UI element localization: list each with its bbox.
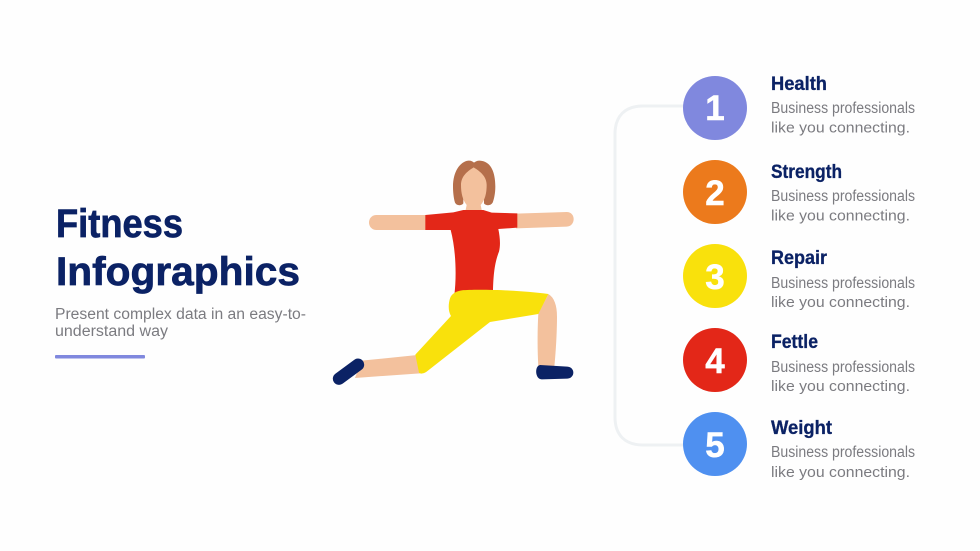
health text: Health [771,74,827,95]
fettle text [771,332,915,395]
repair text: Repair [771,248,828,269]
subtitle text: understand way [55,323,168,340]
number badge 3 [683,244,747,308]
hair [453,161,495,205]
number badge 5 [683,412,747,476]
number badge 4: 4 [705,342,725,381]
item 5: weight [683,412,915,481]
right arm [516,212,574,228]
weight text [771,418,915,481]
health text [771,74,915,136]
face and neck [461,167,487,211]
number badge 3: 3 [705,258,725,297]
front shin [538,294,557,367]
number badge 4 [683,328,747,392]
left arm [369,215,427,230]
health text: like you connecting. [771,120,910,136]
number badge 2 [683,160,747,224]
front shoe [536,365,573,379]
strength text: Business professionals [771,188,915,205]
repair text: Business professionals [771,275,915,292]
yellow shorts [415,290,548,374]
repair text [771,248,915,311]
illustration: lunging woman [339,161,574,379]
subtitle text: Present complex data in an easy-to- [55,306,306,323]
health text: Business professionals [771,100,915,117]
strength text [771,162,915,224]
subtitle text [55,306,306,340]
item 1: health [683,74,915,140]
number badge 1: 1 [705,89,725,128]
shirt [425,210,517,295]
fettle text: like you connecting. [771,379,910,395]
fettle text: Business professionals [771,359,915,376]
weight text: Business professionals [771,444,915,461]
strength text: like you connecting. [771,208,910,224]
number badge 1 [683,76,747,140]
title [56,202,300,294]
item 3: repair [683,244,915,311]
back shin [355,355,420,378]
item 2: strength [683,160,915,224]
fettle text: Fettle [771,332,818,353]
back shoe [339,365,358,379]
number badge 2: 2 [705,174,725,213]
weight text: Weight [771,418,833,439]
title: Fitness [56,202,183,246]
connector bracket [615,106,684,445]
title: Infographics [56,250,300,294]
weight text: like you connecting. [771,465,910,481]
accent underline [55,355,145,358]
number badge 5: 5 [705,426,725,465]
repair text: like you connecting. [771,295,910,311]
item 4: fettle [683,328,915,395]
strength text: Strength [771,162,842,183]
